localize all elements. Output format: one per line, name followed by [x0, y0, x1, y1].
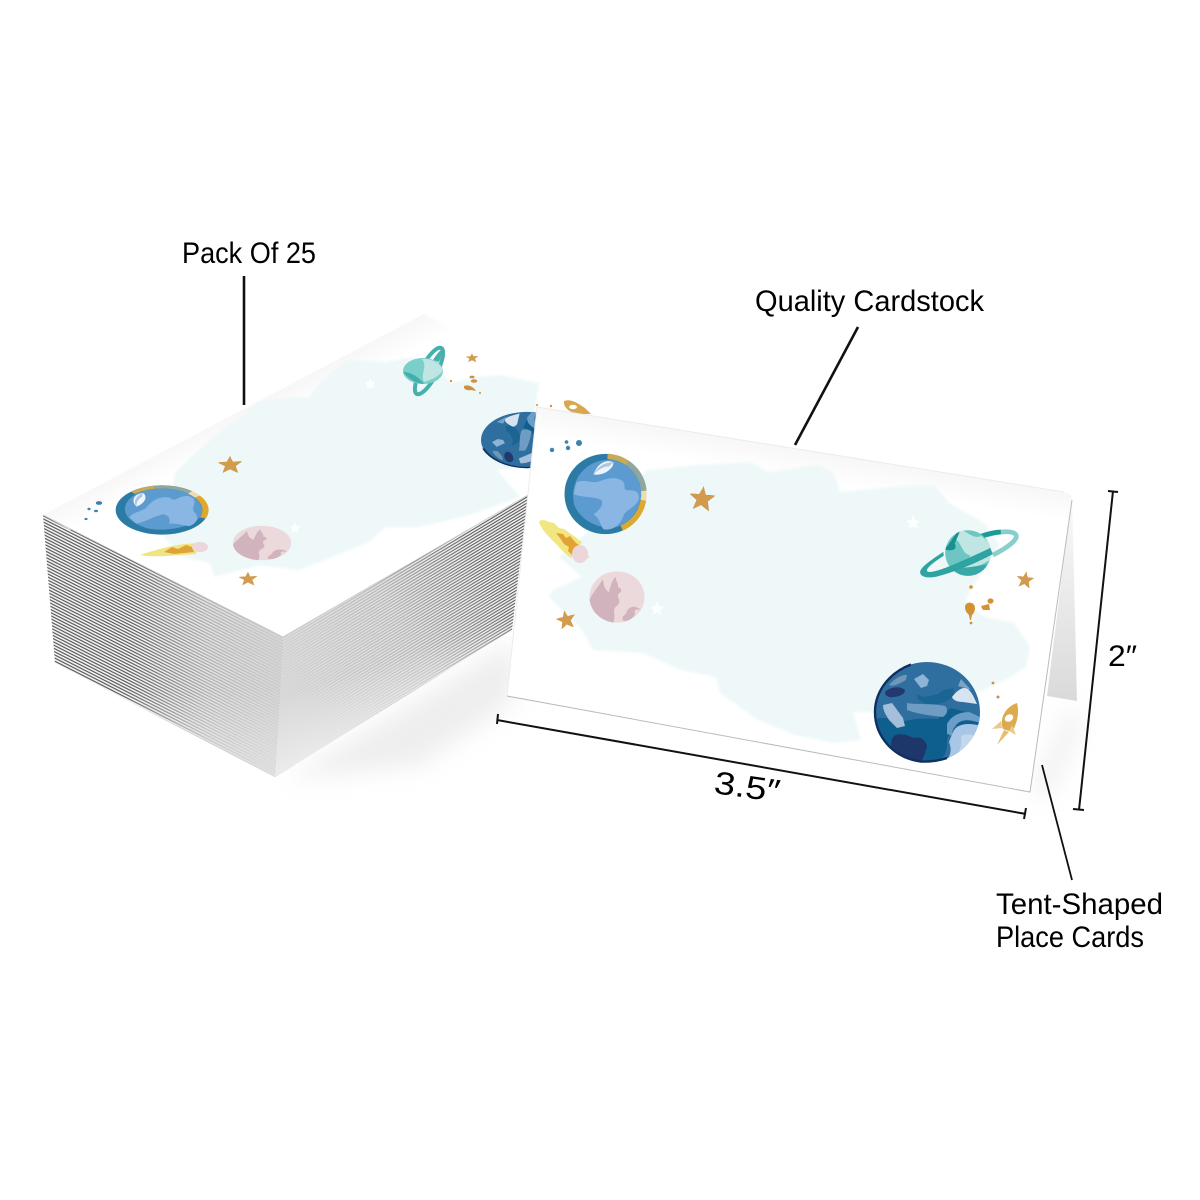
label: Quality Cardstock: Quality Cardstock	[755, 285, 985, 318]
stack blue planet	[96, 475, 228, 545]
gold star right	[1016, 570, 1035, 588]
pack of place cards stack	[43, 314, 640, 777]
blue dots	[550, 440, 582, 452]
gold dots	[992, 682, 1000, 698]
soft shadows under products	[285, 640, 1078, 800]
label: Tent-Shaped Place Cards: Place Cards	[996, 921, 1144, 954]
top card of the stack	[43, 314, 640, 637]
blue planet	[564, 454, 646, 534]
label: Tent-Shaped Place Cards	[996, 765, 1163, 954]
stack blue dots	[84, 501, 102, 520]
comet	[539, 520, 589, 563]
stack pink planet	[232, 526, 291, 561]
card front face	[507, 407, 1072, 792]
card watercolor wash	[549, 462, 1030, 743]
label: Tent-Shaped Place Cards: Tent-Shaped	[996, 888, 1163, 921]
pink planet	[588, 571, 645, 624]
stack gold splatter	[450, 376, 481, 394]
tent card back flap	[1047, 495, 1077, 701]
stack watercolor wash	[164, 357, 539, 577]
stack gold dots	[536, 404, 552, 407]
stack small white stars	[290, 378, 376, 533]
teal ringed planet	[916, 525, 1020, 582]
dimension: height 2 inches	[1073, 491, 1137, 810]
stack right side with card edges	[275, 495, 528, 777]
dark blue planet	[873, 662, 983, 768]
stack gold rocket	[564, 400, 591, 414]
stack left side with card edges	[43, 515, 283, 777]
dimension: width 3.5 inches: 3.5″	[712, 764, 782, 809]
dimension: width 3.5 inches	[497, 714, 1026, 819]
gold rocket	[992, 703, 1018, 745]
label: Quality Cardstock	[755, 285, 985, 445]
stack teal planet	[403, 344, 448, 398]
small white stars in wash	[650, 515, 920, 615]
dimension: height 2 inches: 2″	[1108, 640, 1137, 673]
stack dark planet	[481, 410, 579, 469]
label: Pack Of 25: Pack Of 25	[182, 237, 316, 270]
gold splatter	[965, 585, 994, 624]
tent-shaped place card	[507, 407, 1072, 792]
stack gold stars	[218, 354, 478, 585]
stack comet	[140, 542, 208, 556]
gold star bottom left	[555, 609, 577, 630]
gold star top left	[688, 485, 716, 511]
